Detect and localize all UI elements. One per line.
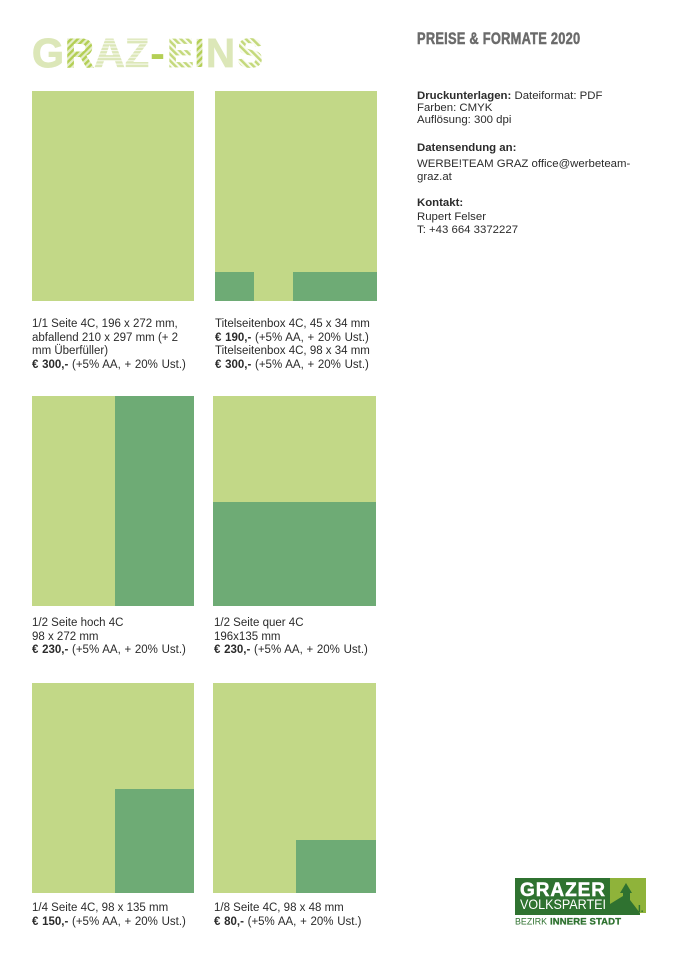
logo: Grazer Volkspartei: VOLKSPARTEI (520, 897, 606, 912)
text block: Kontakt (417, 197, 518, 236)
panel: 1/1 Seite (32, 91, 194, 301)
logo: Grazer Volkspartei: BEZIRK (515, 916, 548, 928)
caption: 1/1 Seite: abfallend 210 x 297 mm (+ 2 (32, 332, 178, 344)
caption: Titelseitenbox: Titelseitenbox 4C, 98 x 34 mm (215, 345, 370, 357)
small box 45 x 34 (215, 272, 254, 301)
panel: 1/2 Seite hoch (32, 396, 194, 606)
panel: 1/4 Seite (32, 683, 194, 893)
text block: Datensendung (417, 142, 630, 182)
caption: Titelseitenbox: € 300,- (+5% AA, + 20% Ust.) (215, 359, 369, 371)
panel: 1/2 Seite quer (213, 396, 376, 606)
eighth page (296, 840, 376, 893)
panel: Titelseitenbox (215, 91, 377, 301)
caption: 1/8 Seite: 1/8 Seite 4C, 98 x 48 mm (214, 902, 344, 914)
text block: Druckunterlagen (417, 90, 602, 126)
logo: Grazer Volkspartei (515, 878, 646, 928)
caption: 1/2 Seite quer: 196x135 mm (214, 631, 280, 643)
caption: 1/2 Seite hoch: 98 x 272 mm (32, 631, 98, 643)
caption: 1/4 Seite: € 150,- (+5% AA, + 20% Ust.) (32, 916, 186, 928)
text block: Druckunterlagen: Auflösung: 300 dpi (417, 114, 511, 126)
caption: 1/1 Seite (32, 318, 186, 371)
caption: 1/1 Seite: € 300,- (+5% AA, + 20% Ust.) (32, 359, 186, 371)
caption: 1/2 Seite hoch: 1/2 Seite hoch 4C (32, 617, 123, 629)
caption: 1/2 Seite quer: € 230,- (+5% AA, + 20% Ust.) (214, 644, 368, 656)
half page vertical (115, 396, 194, 606)
logo: Grazer Volkspartei: GRAZER (520, 880, 605, 901)
heading: Preise & Formate: PREISE & FORMATE 2020 (417, 30, 580, 48)
caption: 1/4 Seite: 1/4 Seite 4C, 98 x 135 mm (32, 902, 168, 914)
text block: Druckunterlagen: Farben: CMYK (417, 102, 492, 114)
caption: 1/2 Seite hoch: € 230,- (+5% AA, + 20% Ust.) (32, 644, 186, 656)
caption: Titelseitenbox: Titelseitenbox 4C, 45 x 34 mm (215, 318, 370, 330)
logo: Grazer Volkspartei: I. (638, 904, 644, 915)
text block: Datensendung: WERBE!TEAM GRAZ office@werbeteam- (417, 158, 630, 170)
caption: 1/8 Seite: € 80,- (+5% AA, + 20% Ust.) (214, 916, 361, 928)
caption: 1/1 Seite: mm Überfüller) (32, 345, 108, 357)
wide box 98 x 34 (293, 272, 377, 301)
text block: Kontakt: T: +43 664 3372227 (417, 224, 518, 236)
caption: Titelseitenbox (215, 318, 370, 371)
caption: 1/4 Seite (32, 902, 186, 928)
caption: 1/2 Seite hoch (32, 617, 186, 656)
caption: Titelseitenbox: € 190,- (+5% AA, + 20% Ust.) (215, 332, 369, 344)
quarter page (115, 789, 194, 893)
text block: Datensendung: graz.at (417, 170, 452, 182)
logo: GRAZ-EINS (32, 33, 263, 73)
text block: Druckunterlagen: Druckunterlagen: Dateiformat: PDF (417, 90, 602, 102)
text block: Datensendung: Datensendung an: (417, 142, 516, 154)
caption: 1/1 Seite: 1/1 Seite 4C, 196 x 272 mm, (32, 318, 178, 330)
caption: 1/2 Seite quer: 1/2 Seite quer 4C (214, 617, 304, 629)
panel: 1/8 Seite (213, 683, 376, 893)
text block: Kontakt: Rupert Felser (417, 210, 486, 222)
caption: 1/8 Seite (214, 902, 361, 928)
logo: Grazer Volkspartei: INNERE STADT (550, 916, 621, 928)
half page horizontal (213, 502, 376, 606)
caption: 1/2 Seite quer (214, 617, 368, 656)
text block: Kontakt: Kontakt: (417, 197, 463, 209)
